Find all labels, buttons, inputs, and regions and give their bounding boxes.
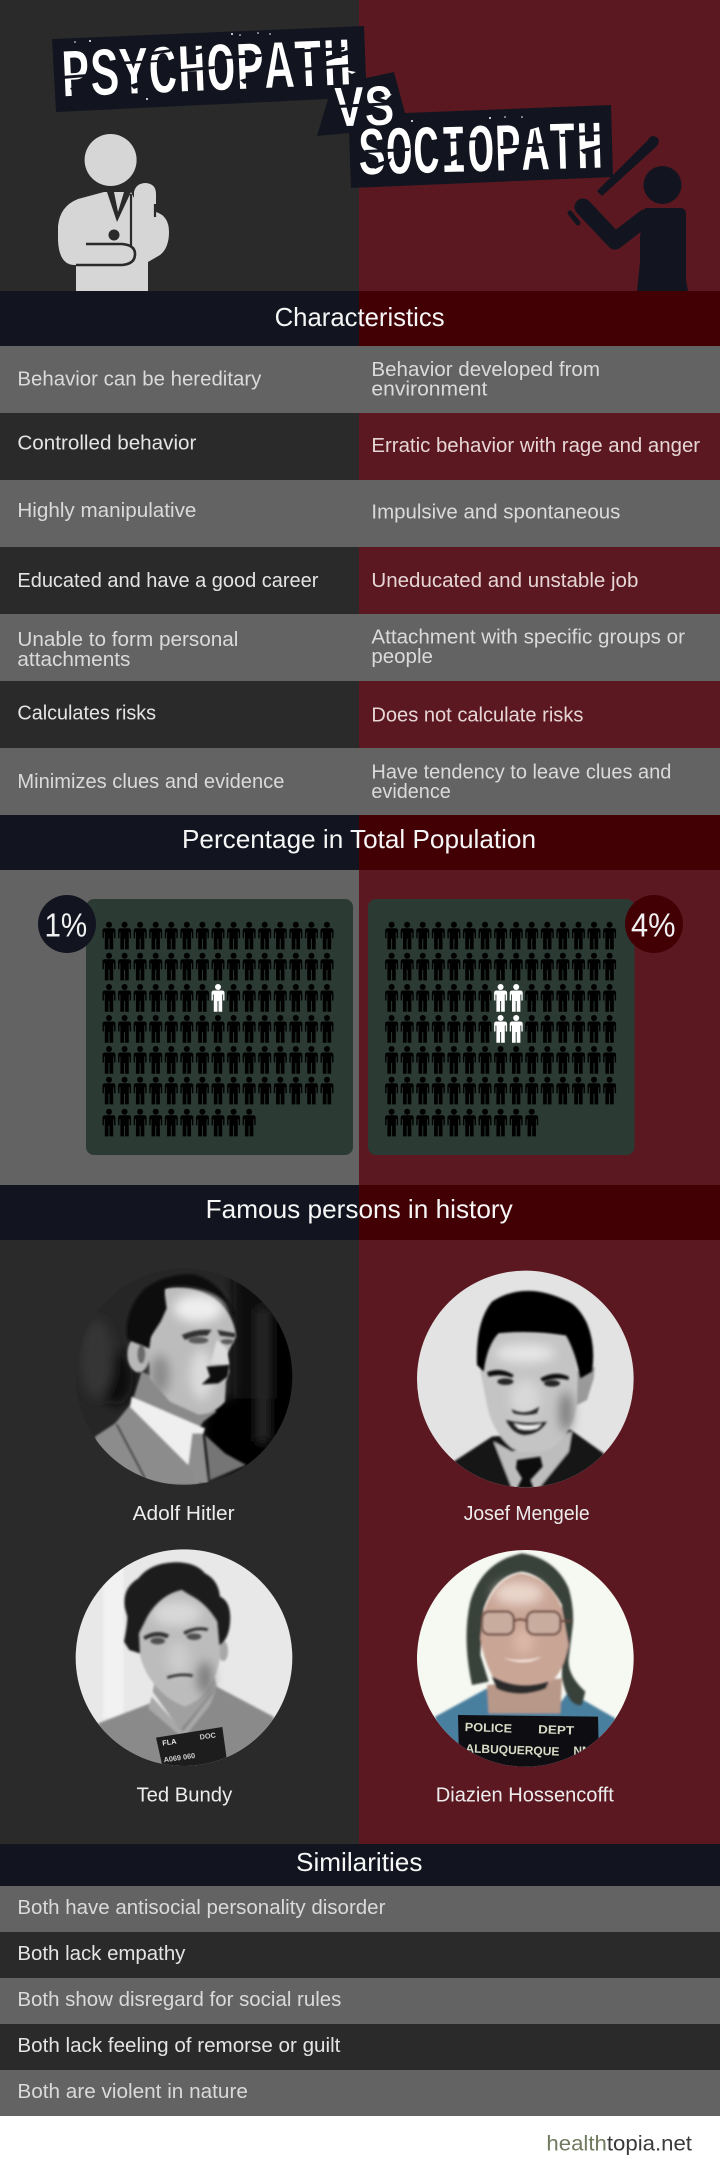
nose shadow — [511, 1407, 539, 1415]
beard — [492, 1677, 549, 1693]
jacket — [454, 1428, 605, 1486]
row 7: evidence — [371, 781, 451, 803]
neck — [487, 1678, 562, 1713]
placard: NM — [573, 1744, 592, 1758]
title: VS: VS — [333, 76, 396, 146]
neck — [153, 1672, 217, 1730]
placard — [156, 1727, 226, 1766]
blue shirt — [435, 1688, 619, 1773]
similarity 4 — [0, 2024, 720, 2070]
placard — [458, 1715, 598, 1767]
face — [480, 1333, 578, 1452]
row 5: Unable to form personal — [17, 629, 238, 651]
heading band: Similarities — [0, 1844, 720, 1886]
row 1: Behavior developed from — [371, 359, 600, 381]
callout: 4% badge — [625, 895, 683, 953]
row 3 — [0, 480, 720, 547]
hair — [477, 1291, 593, 1378]
row 7: Minimizes clues and evidence — [17, 771, 284, 793]
placard: ALBUQUERQUE — [465, 1741, 560, 1759]
eyes — [487, 1370, 514, 1378]
glasses — [482, 1612, 572, 1634]
smile — [503, 1657, 542, 1662]
row 7: Have tendency to leave clues and — [371, 761, 671, 783]
shirt — [494, 1432, 572, 1488]
similarity 4: Both lack feeling of remorse or guilt — [17, 2035, 341, 2057]
row 5 — [0, 614, 720, 681]
row 6: Calculates risks — [17, 702, 156, 724]
title banner — [52, 26, 613, 197]
label: Diazien Hossencofft: Diazien Hossencofft — [436, 1785, 614, 1807]
heading band: Famous persons in history — [0, 1185, 720, 1240]
panel: famous persons background — [0, 1240, 720, 1844]
row 3: Impulsive and spontaneous — [371, 502, 620, 524]
chart: 1% pictogram — [86, 899, 353, 1155]
face — [138, 1590, 220, 1707]
callout: 4% badge: 4% — [631, 907, 676, 944]
similarity 3: Both show disregard for social rules — [17, 1989, 341, 2011]
similarity 5: Both are violent in nature — [17, 2081, 248, 2103]
callout: 1% badge: 1% — [44, 907, 87, 944]
eyes — [143, 1632, 169, 1640]
row 4: Educated and have a good career — [17, 570, 319, 592]
row 6 — [0, 681, 720, 748]
panel: characteristics comparison rows — [0, 346, 720, 815]
shirt collar — [130, 1397, 205, 1465]
row 4 — [0, 547, 720, 614]
chart: 4% pictogram — [368, 899, 634, 1155]
heading band: Characteristics — [0, 291, 720, 346]
panel: population background — [0, 870, 720, 1185]
row 2: Controlled behavior — [17, 432, 197, 454]
label: Josef Mengele: Josef Mengele — [464, 1503, 590, 1525]
row 5: people — [371, 646, 433, 668]
portrait: Ted Bundy — [70, 1545, 298, 1773]
header background — [0, 0, 720, 291]
icon: sociopath figure with bat — [570, 136, 688, 291]
jacket — [95, 1405, 199, 1485]
heading band: Percentage in Total Population — [0, 815, 720, 870]
brows and eyes — [182, 1330, 212, 1340]
footer: healthtopia.net logo — [0, 2116, 720, 2175]
similarity 5 — [0, 2070, 720, 2116]
icon: psychopath figure in suit — [58, 134, 169, 291]
row 6: Does not calculate risks — [371, 704, 583, 726]
similarity 1: Both have antisocial personality disorder — [17, 1897, 386, 1919]
title: PSYCHOPATH: PSYCHOPATH — [60, 28, 354, 119]
face — [148, 1287, 236, 1414]
ear — [219, 1641, 228, 1661]
face — [480, 1573, 569, 1689]
heading band: Percentage in Total Population: Percentage in Total Population — [182, 824, 536, 854]
placard: FLA — [162, 1737, 178, 1748]
row 2: Erratic behavior with rage and anger — [371, 435, 700, 457]
ear — [127, 1336, 150, 1372]
hair — [467, 1553, 585, 1705]
footer: healthtopia.net logo: healthtopia.net — [546, 2133, 692, 2156]
tie — [188, 1433, 208, 1483]
label: Ted Bundy: Ted Bundy — [136, 1785, 232, 1807]
row 1 — [0, 346, 720, 413]
portrait: Josef Mengele — [412, 1265, 640, 1493]
row 1: Behavior can be hereditary — [17, 368, 261, 390]
hair — [127, 1274, 237, 1348]
neck and ear — [577, 1367, 595, 1405]
heading band: Characteristics: Characteristics — [275, 302, 445, 332]
row 5: Attachment with specific groups or — [371, 626, 685, 648]
row 7 — [0, 748, 720, 815]
placard: A069 060 — [163, 1751, 196, 1764]
mouth — [167, 1675, 193, 1678]
placard: DOC — [199, 1730, 217, 1742]
callout: 1% badge — [38, 895, 96, 953]
similarity 1 — [0, 1886, 720, 1932]
neck — [132, 1370, 218, 1428]
similarity 3 — [0, 1978, 720, 2024]
row 3: Highly manipulative — [17, 500, 196, 522]
hair — [124, 1562, 230, 1653]
shirt — [98, 1687, 283, 1773]
placard: DEPT — [538, 1722, 575, 1738]
moustache — [202, 1365, 229, 1384]
row 4: Uneducated and unstable job — [371, 570, 638, 592]
mouth — [506, 1420, 547, 1435]
row 1: environment — [371, 378, 488, 400]
panel: similarities list — [0, 1886, 720, 2116]
row 2 — [0, 413, 720, 480]
portrait: Adolf Hitler — [85, 1273, 292, 1485]
heading band: Similarities: Similarities — [296, 1847, 422, 1877]
tie — [516, 1457, 543, 1488]
placard: POLICE — [465, 1720, 512, 1736]
label: Adolf Hitler: Adolf Hitler — [133, 1503, 235, 1525]
portrait: Diazien Hossencofft — [412, 1545, 640, 1773]
grunge scratches over the lettering — [62, 46, 604, 169]
row 5: attachments — [17, 649, 130, 671]
black torn banner shape — [52, 26, 613, 188]
heading band: Famous persons in history: Famous persons in history — [206, 1194, 513, 1224]
similarity 2: Both lack empathy — [17, 1943, 185, 1965]
similarity 2 — [0, 1932, 720, 1978]
